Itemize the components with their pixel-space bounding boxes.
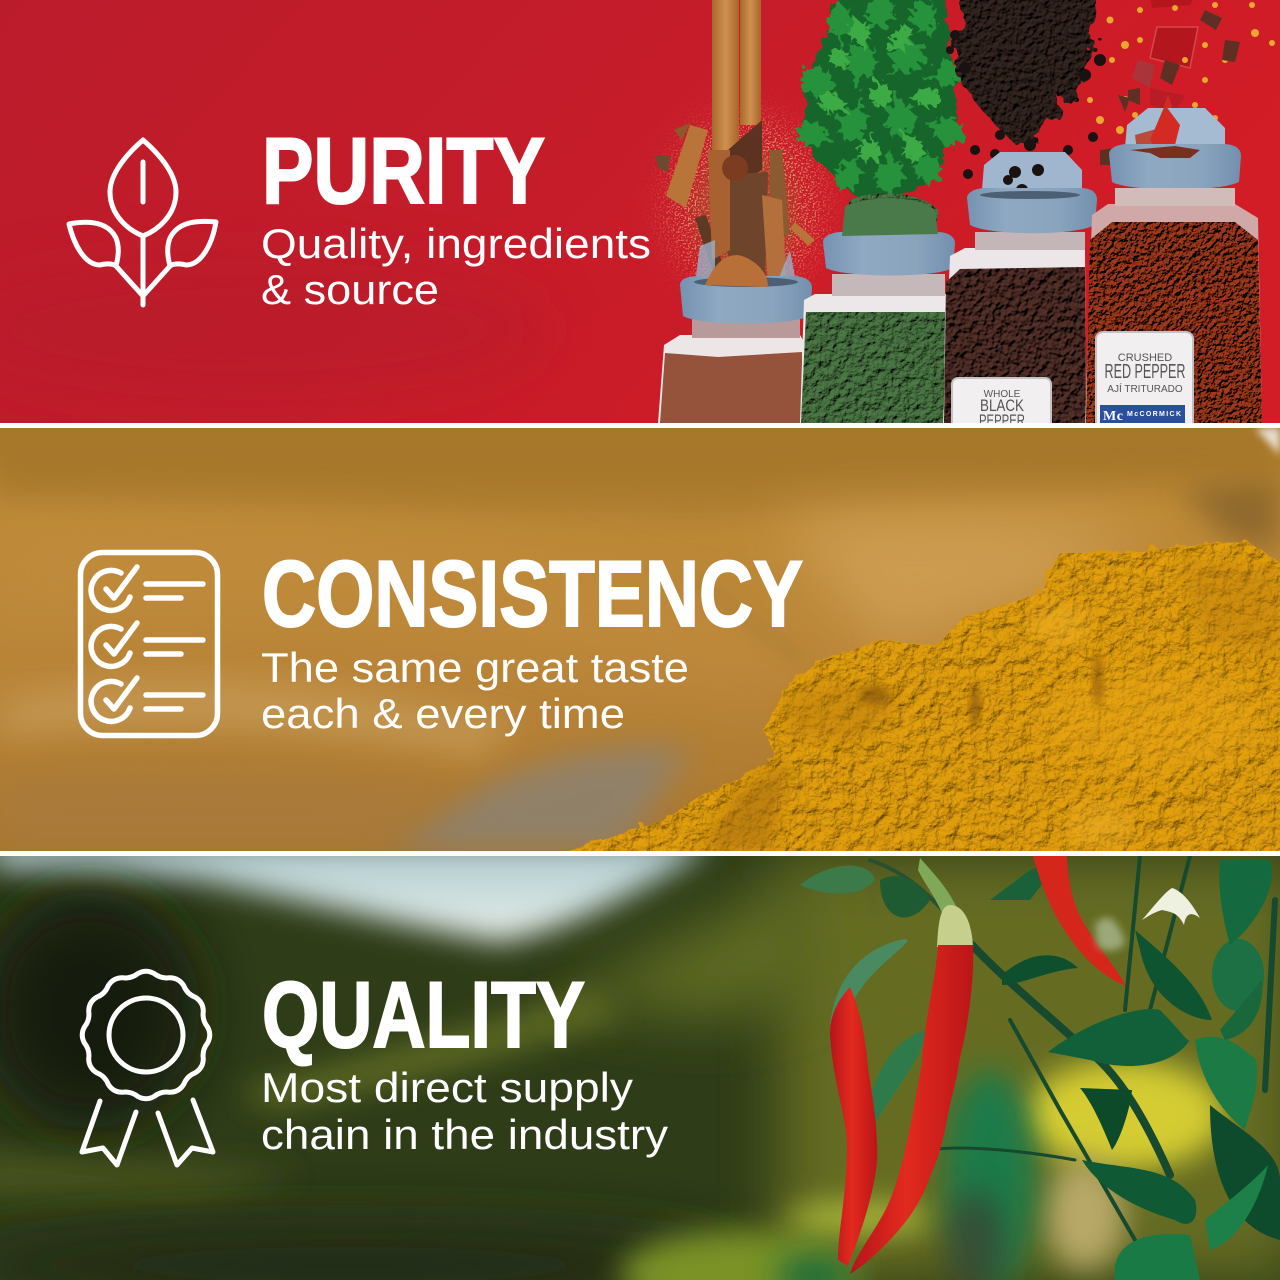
icon: checklist — [80, 552, 218, 736]
jar: cinnamon — [658, 240, 812, 423]
panel: consistency — [0, 428, 1280, 851]
label: crushed red pepper: McCORMICK — [1127, 411, 1181, 418]
turmeric powder mound — [569, 542, 1280, 851]
chili plant foliage — [800, 856, 1280, 1280]
text: quality description: Most direct supply — [261, 1064, 633, 1111]
text: quality description — [261, 1064, 668, 1158]
icon: award rosette — [82, 971, 213, 1165]
heading: CONSISTENCY: CONSISTENCY — [262, 541, 803, 646]
label: whole black pepper — [951, 377, 1052, 423]
label: whole black pepper: WHOLE — [984, 389, 1021, 400]
label: crushed red pepper — [1095, 331, 1194, 423]
spice burst: cinnamon — [655, 0, 820, 290]
text: purity description: & source — [261, 266, 439, 313]
heading: QUALITY: QUALITY — [262, 962, 585, 1067]
label: crushed red pepper: Mc — [1103, 409, 1123, 424]
text: consistency description: each & every time — [261, 690, 625, 737]
text: quality description: chain in the industry — [261, 1111, 668, 1158]
jar: dried herbs — [800, 198, 955, 423]
icon: leaf sprout — [69, 140, 216, 305]
text: purity description — [261, 220, 651, 313]
label: crushed red pepper: RED PEPPER — [1104, 361, 1186, 383]
spice burst: black pepper — [946, 0, 1106, 179]
heading: PURITY: PURITY — [262, 118, 545, 223]
text: consistency description — [261, 644, 689, 737]
label: whole black pepper: BLACK — [980, 396, 1025, 415]
red chili: back — [830, 987, 877, 1266]
jar: black pepper — [943, 152, 1097, 438]
label: whole black pepper: PEPPER — [979, 411, 1025, 430]
panel: quality — [0, 840, 1280, 1280]
white chili flowers — [1095, 888, 1200, 950]
blurred sky — [0, 840, 710, 942]
label: crushed red pepper: AJÍ TRITURADO — [1107, 382, 1183, 395]
label: crushed red pepper: CRUSHED — [1118, 352, 1172, 364]
text: purity description: Quality, ingredients — [261, 220, 651, 267]
red chili: top right — [1033, 856, 1126, 986]
text: consistency description: The same great taste — [261, 644, 689, 691]
red chili: front with stem — [850, 858, 973, 1274]
dried thyme falling into jar — [848, 193, 938, 222]
spice burst: red pepper flakes — [1087, 0, 1275, 165]
panel: purity — [0, 0, 1280, 442]
jar: crushed red pepper — [1085, 105, 1262, 442]
spice burst: fresh herbs — [796, 0, 966, 222]
